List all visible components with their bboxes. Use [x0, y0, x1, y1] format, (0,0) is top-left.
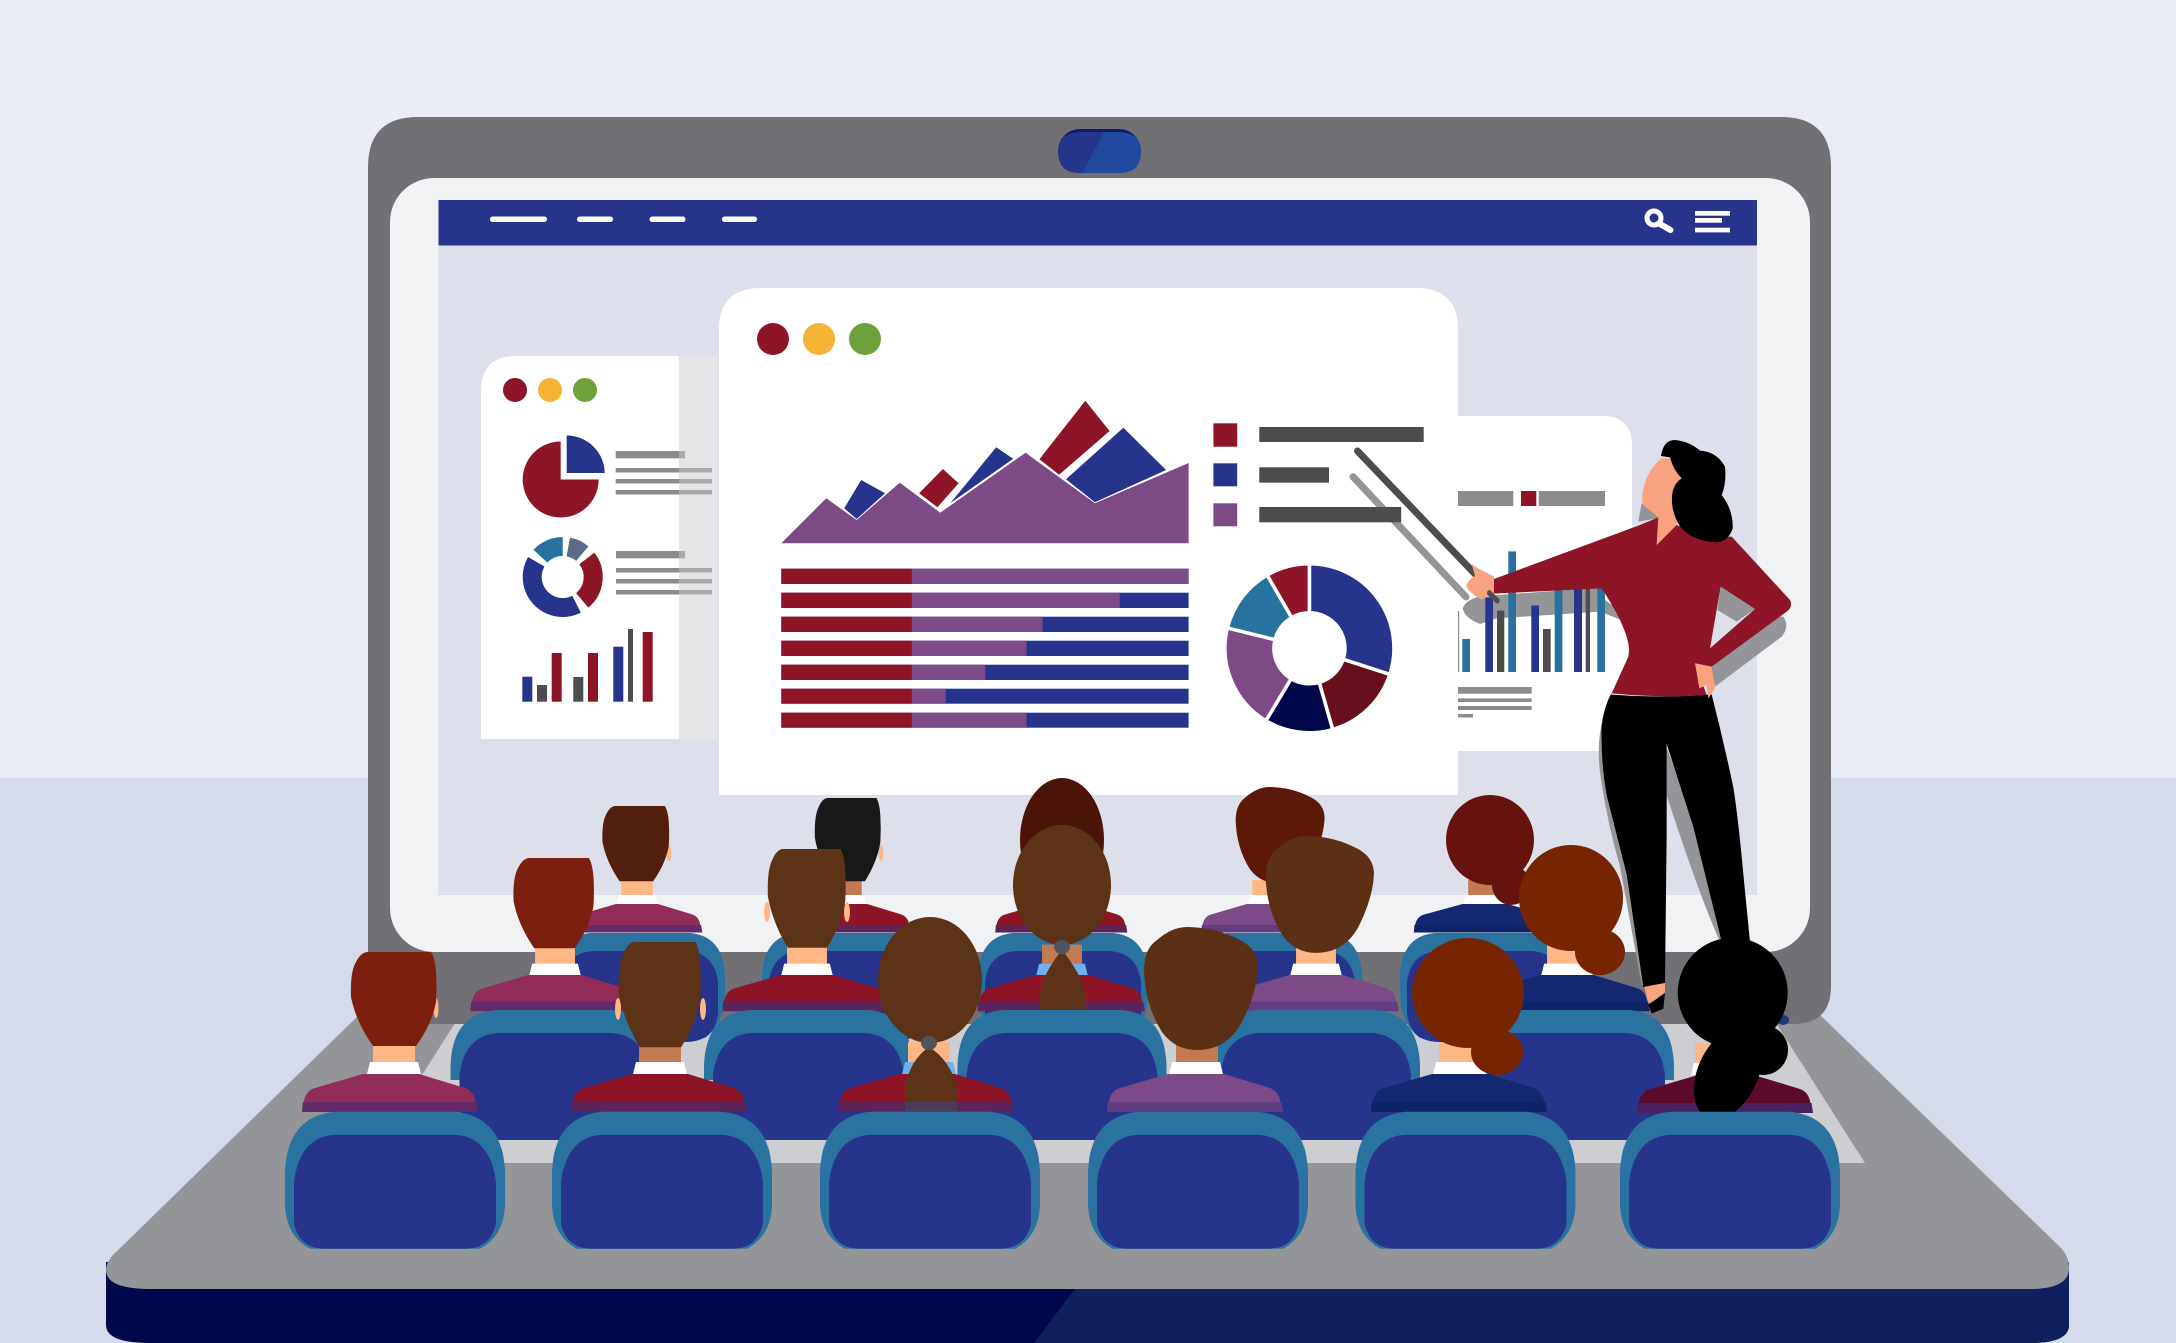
- legend: [1213, 423, 1424, 526]
- person: back row 3: [995, 778, 1127, 932]
- browser header bar: [438, 200, 1757, 246]
- person: front row 1: [302, 952, 478, 1112]
- person: back row 2: [779, 798, 911, 932]
- person: back row 5: [1414, 795, 1555, 932]
- background floor: [0, 778, 2176, 1343]
- area chart: [781, 401, 1189, 543]
- middle row chairs: [450, 1010, 1674, 1140]
- panel: left window: [481, 356, 717, 739]
- front row chairs: [285, 1112, 1840, 1249]
- person: back row 4: [1201, 787, 1333, 932]
- person: middle row 5: [1482, 845, 1650, 1011]
- presenter face and neck: [1642, 458, 1682, 545]
- person: front row 3 with ponytail: [838, 917, 1014, 1112]
- presenter shadow: [1463, 503, 1786, 985]
- right window bar chart: [1462, 551, 1605, 672]
- laptop lid: [368, 117, 1831, 1024]
- panel: main window: [719, 288, 1466, 795]
- presenter hand holding pointer: [1466, 564, 1494, 600]
- person: front row 4: [1107, 927, 1283, 1112]
- presenter hand on hip: [1695, 663, 1715, 698]
- pointer grip: [1489, 593, 1497, 601]
- pointer stick: [1358, 451, 1475, 574]
- donut chart: [1225, 564, 1394, 733]
- presenter hair: [1661, 440, 1733, 542]
- person: middle row 2: [722, 849, 890, 1011]
- screen area: [438, 200, 1757, 895]
- presenter pants: [1601, 694, 1750, 987]
- background wall: [0, 0, 2176, 778]
- presenter woman: [1466, 440, 1791, 1013]
- webcam: [1058, 129, 1141, 173]
- laptop base: [106, 1012, 2069, 1343]
- stacked bar chart: [781, 569, 1189, 728]
- person: middle row 4: [1231, 836, 1399, 1011]
- panel: right window: [1450, 416, 1632, 751]
- pointer shadow: [1353, 477, 1466, 597]
- person: back row 1: [570, 806, 702, 932]
- screen bezel: [390, 178, 1810, 952]
- person: front row 5: [1371, 938, 1547, 1112]
- person: middle row 3 with ponytail: [977, 825, 1145, 1011]
- person: front row 6: [1637, 938, 1813, 1130]
- presenter shirt: [1494, 517, 1791, 696]
- ponytail: [905, 1047, 957, 1112]
- person: middle row 1: [470, 858, 638, 1011]
- back row chairs: [555, 933, 1570, 1042]
- presenter foot: [1644, 983, 1665, 1013]
- person: front row 2: [571, 942, 747, 1112]
